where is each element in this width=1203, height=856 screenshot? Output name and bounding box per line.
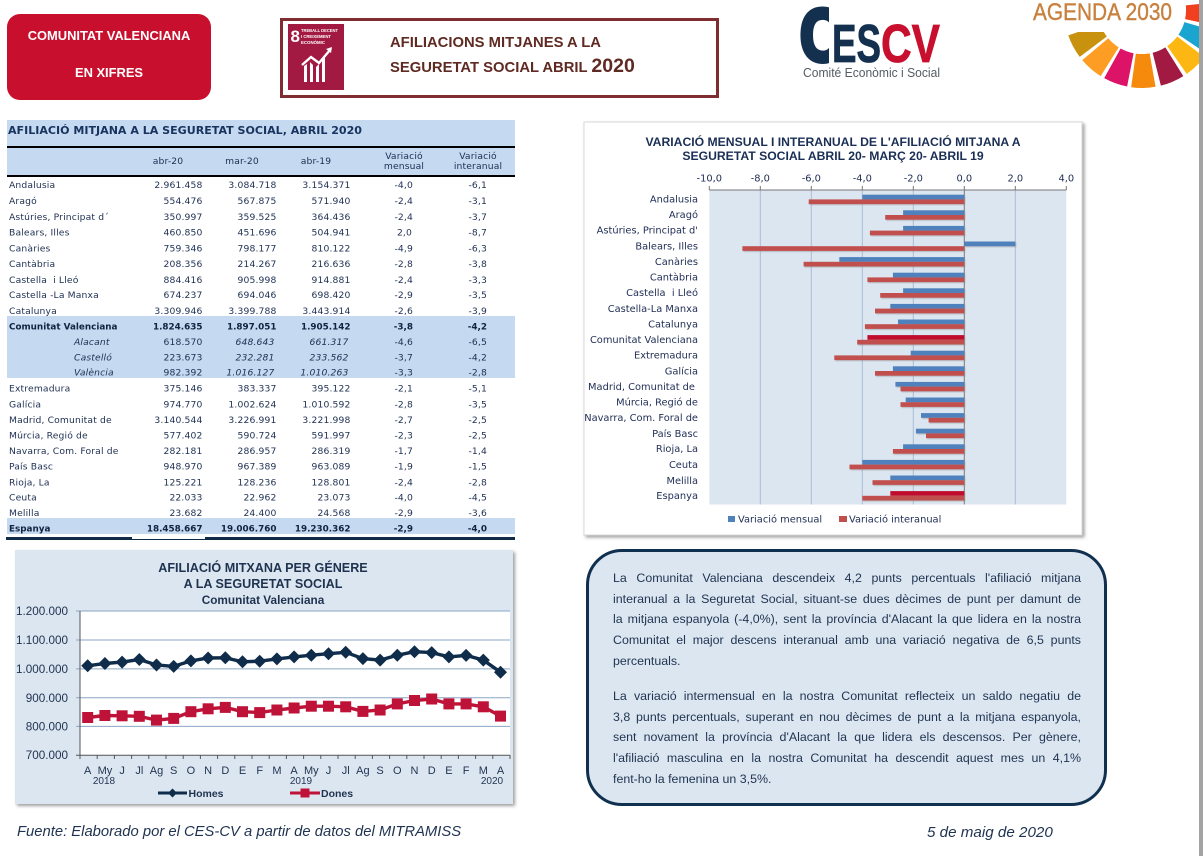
row: Alacant: -4,6 — [394, 337, 413, 348]
x axis labels: -8,0 — [751, 174, 770, 184]
row: País Basc: 967.389 — [237, 462, 277, 472]
table header: Variació — [385, 151, 423, 162]
row: Melilla: -2,9 — [394, 508, 413, 519]
row: Comunitat Valenciana: -3,8 — [394, 322, 413, 332]
header title box — [280, 18, 719, 98]
month labels: S — [170, 765, 177, 777]
chart title: AFILIACIÓ MITXANA PER GÉNERE — [158, 560, 368, 575]
logo: CES CV: Comité Econòmic i Social — [803, 66, 940, 80]
month labels: M — [479, 765, 488, 777]
row: Aragó: -3,1 — [468, 196, 487, 207]
heading: affiliation title — [390, 34, 635, 76]
category labels: Castella-La Manxa — [608, 304, 698, 315]
month labels: Jl — [135, 765, 143, 777]
row: Andalusia: 2.961.458 — [154, 180, 203, 191]
month labels: My — [98, 765, 113, 777]
footer: source: Fuente: Elaborado por el CES-CV a partir de datos del MITRAMISS — [17, 824, 461, 840]
row: Comunitat Valenciana: 1.824.635 — [153, 322, 202, 332]
row: Canàries: 810.122 — [311, 244, 350, 254]
row: Canàries: 759.346 — [163, 244, 203, 254]
x axis labels: -6,0 — [802, 174, 821, 184]
chart title: A LA SEGURETAT SOCIAL — [184, 577, 343, 591]
row: Rioja: 125.221 — [163, 478, 202, 488]
chart title: VARIACIÓ MENSUAL I INTERANUAL DE L'AFILIACIÓ MITJANA A — [645, 134, 1021, 149]
row: Alacant: 648.643 — [235, 337, 275, 348]
row: Comunitat Valenciana: 1.897.051 — [227, 322, 276, 332]
row: Astúries — [9, 212, 487, 223]
monthly variation bars — [839, 195, 1015, 496]
row: Castella-La Manxa: 674.237 — [163, 290, 203, 301]
row: Castella-La Manxa — [9, 290, 487, 301]
header badge: Comunitat Valenciana en xifres: COMUNITAT VALENCIANA — [28, 28, 190, 43]
category labels: Extremadura — [634, 350, 698, 362]
month labels: E — [445, 765, 453, 777]
row: Comunitat Valenciana: -4,2 — [468, 322, 487, 332]
row: Aragó — [9, 196, 487, 207]
paragraph: monthly variation: fent-ho la femenina un 3,5%. — [613, 772, 771, 786]
table header: mensual — [384, 161, 424, 172]
row: Madrid: 3.221.998 — [302, 415, 351, 426]
table header — [153, 151, 502, 172]
row: Navarra: 286.957 — [237, 446, 277, 457]
row: Castelló: -4,2 — [468, 352, 487, 364]
month labels: N — [411, 765, 419, 777]
month labels: O — [393, 765, 402, 777]
row: Extremadura: 375.146 — [163, 384, 203, 394]
category labels: Comunitat Valenciana — [590, 335, 698, 346]
row: Castella-La Manxa: -3,5 — [468, 290, 487, 301]
row: Alacant — [73, 337, 487, 348]
month labels: My — [304, 765, 319, 777]
row: Navarra — [9, 446, 487, 457]
row: Galícia: 1.010.592 — [302, 400, 350, 410]
row: País Basc: 948.970 — [163, 462, 203, 472]
row: Castelló: 232.281 — [235, 352, 274, 364]
row: Aragó: Aragó — [9, 196, 37, 207]
paragraph: annual variation: interanual a la Seguretat Social, situant-se dues dècimes de punt per damunt de — [613, 592, 1081, 606]
row: Catalunya: -2,6 — [394, 306, 413, 317]
month labels: Jl — [342, 765, 350, 777]
row: València: 1.016.127 — [226, 368, 275, 378]
row: Castella i Lleó: 914.881 — [311, 275, 350, 286]
row: Extremadura: Extremadura — [9, 384, 70, 394]
category labels: Balears, Illes — [635, 242, 698, 252]
row: Madrid: 3.226.991 — [228, 415, 276, 426]
chart legend — [728, 514, 941, 526]
row: Alacant: Alacant — [73, 337, 110, 348]
category labels: Rioja, La — [656, 444, 698, 455]
paragraph: monthly variation: l'afiliació masculina en la nostra Comunitat ha descendit aquest mes un 4,1% — [613, 751, 1081, 765]
month labels: S — [376, 765, 384, 777]
row: Castella-La Manxa: Castella -La Manxa — [9, 290, 99, 301]
row: Extremadura: -5,1 — [468, 384, 487, 394]
table header: mar-20 — [225, 156, 259, 167]
row: Melilla: 24.568 — [317, 508, 350, 519]
row: Andalusia: -6,1 — [468, 180, 487, 191]
row: Múrcia: -2,3 — [394, 430, 413, 442]
row: Extremadura: 395.122 — [311, 384, 350, 394]
x axis labels: 0,0 — [956, 174, 972, 184]
row: Melilla: 23.682 — [169, 508, 202, 519]
x axis labels: 2,0 — [1007, 174, 1023, 184]
row: Rioja: -2,4 — [394, 478, 413, 488]
row: Balears: 2,0 — [397, 228, 412, 238]
row: Castella i Lleó — [9, 275, 487, 286]
row: Catalunya: 3.309.946 — [154, 306, 203, 317]
icon: SDG 8 decent work and economic growth: TREBALL DECENT — [301, 28, 338, 33]
row: Ceuta: 23.073 — [317, 492, 350, 504]
row: Comunitat Valenciana — [9, 322, 487, 332]
month labels: E — [239, 765, 246, 777]
year labels: 2019 — [290, 776, 313, 787]
table header: abr-20 — [153, 156, 183, 167]
row: Andalusia: 3.154.371 — [302, 180, 350, 191]
category labels: Melilla — [666, 476, 698, 487]
logo: Agenda 2030 wheel — [1032, 3, 1199, 88]
y axis labels: 800.000 — [26, 720, 68, 734]
month labels: A — [84, 765, 92, 777]
row: Galícia: 1.002.624 — [228, 400, 277, 410]
row: Cantàbria: 214.267 — [237, 259, 277, 270]
logo: CES CV: CV — [881, 14, 940, 74]
row: Andalusia — [9, 180, 487, 191]
month labels: A — [497, 765, 505, 777]
icon: SDG 8 decent work and economic growth: ECONÒMIC — [301, 40, 326, 45]
row: Castella-La Manxa: 694.046 — [237, 290, 277, 301]
row: Castelló: 233.562 — [309, 352, 349, 364]
icon: SDG 8 decent work and economic growth — [288, 24, 344, 90]
chart title: Comunitat Valenciana — [202, 593, 325, 607]
x axis labels: 4,0 — [1058, 174, 1074, 184]
row: Castelló: 223.673 — [163, 352, 203, 364]
row: País Basc: País Basc — [9, 462, 53, 472]
row: Múrcia: 591.997 — [311, 430, 351, 442]
category labels: Canàries — [655, 256, 698, 268]
x axis labels: -10,0 — [697, 174, 722, 184]
month labels: A — [290, 765, 298, 777]
chart legend — [158, 788, 353, 800]
row: Balears: Balears, Illes — [9, 228, 70, 238]
row: València: València — [74, 368, 114, 378]
row: Navarra: Navarra, Com. Foral de — [9, 446, 119, 457]
row: Melilla: 24.400 — [243, 508, 276, 519]
row: Canàries: Canàries — [9, 244, 51, 254]
row: Múrcia: 590.724 — [237, 430, 277, 442]
row: País Basc: 963.089 — [311, 462, 351, 472]
line: Homes — [88, 652, 500, 672]
row: València: -3,3 — [394, 368, 413, 378]
year labels: 2020 — [481, 776, 504, 787]
row: Rioja: 128.236 — [237, 478, 277, 488]
row: Astúries: Astúries, Principat d´ — [9, 212, 109, 223]
row: Andalusia: 3.084.718 — [228, 180, 277, 191]
paragraph: annual variation: Comunitat el major descens interanual amb una variació negativa de 6,5 punts — [613, 633, 1081, 647]
row: Múrcia: -2,5 — [468, 430, 487, 442]
row: València — [74, 368, 487, 378]
chart title — [645, 134, 1021, 163]
row: Balears: -8,7 — [468, 228, 487, 238]
category labels: Navarra, Com. Foral de — [584, 413, 698, 424]
category labels: Espanya — [656, 491, 698, 502]
row: Espanya: 19.230.362 — [295, 524, 350, 534]
chart legend: Variació interanual — [849, 514, 941, 526]
row: Balears: 460.850 — [163, 228, 203, 238]
row: País Basc: -1,5 — [468, 462, 487, 472]
row: Navarra: -1,7 — [394, 446, 413, 457]
row: Castella i Lleó: 884.416 — [163, 275, 203, 286]
row: Aragó: -2,4 — [394, 196, 413, 207]
row: Melilla — [9, 508, 487, 519]
row: Extremadura — [9, 384, 487, 394]
row: Catalunya: 3.399.788 — [228, 306, 277, 317]
y axis labels: 700.000 — [26, 749, 68, 762]
row: Extremadura: -2,1 — [394, 384, 413, 394]
line: Dones — [88, 699, 500, 720]
row: Canàries: -6,3 — [468, 244, 487, 254]
row: Astúries: 364.436 — [311, 212, 351, 223]
row: Aragó: 571.940 — [311, 196, 351, 207]
table title: AFILIACIÓ MITJANA A LA SEGURETAT SOCIAL, ABRIL 2020 — [8, 124, 362, 137]
paragraph: annual variation: La Comunitat Valenciana descendeix 4,2 punts percentuals l'afiliació mitjana — [613, 571, 1081, 585]
row: Castelló — [74, 352, 487, 364]
paragraph: monthly variation: 3,8 punts percentuals, superant en nou dècimes de punt a la mitjana espanyola, — [613, 710, 1081, 724]
row: Canàries: -4,9 — [394, 244, 413, 254]
row: Rioja: Rioja, La — [9, 478, 50, 488]
x axis labels: -4,0 — [853, 174, 872, 184]
row: Cantàbria: 208.356 — [163, 259, 203, 270]
month labels: J — [119, 765, 125, 777]
category labels: País Basc — [652, 428, 698, 440]
category labels: Castella i Lleó — [626, 287, 698, 299]
row: Espanya: 18.458.667 — [147, 524, 202, 534]
footer: date: 5 de maig de 2020 — [927, 824, 1053, 841]
row: Castelló: Castelló — [74, 352, 112, 364]
row: Canàries: 798.177 — [237, 244, 277, 254]
row: Aragó: 554.476 — [163, 196, 203, 207]
chart legend: Variació mensual — [738, 514, 822, 526]
category labels: Andalusia — [650, 194, 698, 206]
month labels: Ag — [356, 765, 370, 777]
chart title — [158, 560, 368, 607]
row: Andalusia: Andalusia — [9, 180, 55, 191]
row: Cantàbria — [9, 259, 487, 270]
year labels — [93, 776, 504, 787]
heading: affiliation title: AFILIACIONS MITJANES A LA — [390, 34, 601, 50]
row: Galícia: -3,5 — [468, 400, 487, 410]
row: Navarra: 282.181 — [163, 446, 202, 457]
row: Astúries: 350.997 — [163, 212, 203, 223]
row: Navarra: -1,4 — [468, 446, 487, 457]
y axis labels: 1.100.000 — [16, 634, 68, 647]
row: Castella i Lleó: -2,4 — [394, 275, 413, 286]
row: Alacant: 661.317 — [309, 337, 349, 348]
row: Melilla: Melilla — [9, 508, 39, 519]
row: Ceuta: 22.033 — [169, 492, 202, 504]
table header: Variació — [459, 151, 497, 162]
row: Catalunya: -3,9 — [468, 306, 487, 317]
row: Catalunya — [9, 306, 487, 317]
category labels: Astúries, Principat d' — [597, 224, 698, 236]
row: Espanya: Espanya — [9, 524, 50, 534]
row: Rioja: 128.801 — [311, 478, 350, 488]
row: Aragó: 567.875 — [237, 196, 277, 207]
row: País Basc: -1,9 — [394, 462, 413, 472]
month labels: O — [187, 765, 196, 777]
paragraph: monthly variation: sent novament la província d'Alacant la que lidera els descensos. Per gènere, — [613, 730, 1081, 744]
row: Rioja: -2,8 — [468, 478, 487, 488]
row: Galícia: -2,8 — [394, 400, 413, 410]
row: Rioja — [9, 478, 487, 488]
row: Cantàbria: Cantàbria — [9, 259, 55, 270]
row: Madrid — [9, 415, 487, 426]
row: Alacant: -6,5 — [468, 337, 487, 348]
row: Castella i Lleó: -3,3 — [468, 275, 487, 286]
row: País Basc — [9, 462, 487, 472]
paragraph: monthly variation — [613, 689, 1081, 786]
row: Andalusia: -4,0 — [394, 180, 413, 191]
month labels: N — [204, 765, 212, 777]
row: Astúries: 359.525 — [237, 212, 277, 223]
header badge: Comunitat Valenciana en xifres — [7, 14, 211, 100]
month labels: Ag — [150, 765, 163, 777]
row: Galícia — [9, 400, 487, 410]
row: Navarra: 286.319 — [311, 446, 351, 457]
row: Galícia: 974.770 — [163, 400, 203, 410]
icon: SDG 8 decent work and economic growth: I CREIXEMENT — [301, 34, 331, 39]
paragraph: annual variation: la mitjana espanyola (-4,0%), sent la província d'Alacant la que lidera en la nostra — [613, 612, 1081, 626]
row: València: -2,8 — [468, 368, 487, 378]
row: Astúries: -2,4 — [394, 212, 413, 223]
month labels: D — [428, 765, 436, 777]
row: Múrcia — [9, 430, 487, 442]
row: Canàries — [9, 244, 487, 254]
category labels — [584, 194, 698, 502]
month labels: F — [463, 765, 470, 777]
row: Astúries: -3,7 — [468, 212, 487, 223]
heading: affiliation title: SEGURETAT SOCIAL ABRIL 2020 — [390, 54, 635, 76]
row: Madrid: -2,5 — [468, 415, 487, 426]
row: Castella i Lleó: 905.998 — [237, 275, 277, 286]
row: Cantàbria: -2,8 — [394, 259, 413, 270]
month labels: D — [221, 765, 229, 777]
text box: commentary — [586, 549, 1107, 806]
category labels: Catalunya — [648, 320, 698, 330]
row: Galícia: Galícia — [9, 400, 41, 410]
year labels: 2018 — [93, 776, 116, 787]
row: Ceuta: -4,5 — [468, 492, 487, 504]
row: València: 982.392 — [163, 368, 202, 378]
icon: SDG 8 decent work and economic growth: 8 — [290, 27, 300, 46]
month labels — [84, 765, 505, 777]
category labels: Galícia — [665, 366, 698, 378]
row: Madrid: 3.140.544 — [154, 415, 203, 426]
row: Cantàbria: 216.636 — [311, 259, 351, 270]
logo: CES CV: ES — [832, 14, 881, 74]
row: Castella-La Manxa: -2,9 — [394, 290, 413, 301]
row: Ceuta — [9, 492, 487, 504]
row: Madrid: Madrid, Comunitat de — [9, 415, 112, 426]
category labels: Madrid, Comunitat de — [588, 382, 695, 393]
row: Extremadura: 383.337 — [237, 384, 277, 394]
paragraph: annual variation — [613, 571, 1081, 668]
row: Ceuta: Ceuta — [9, 492, 37, 504]
table header: interanual — [454, 161, 502, 172]
x axis labels: -2,0 — [904, 174, 923, 184]
header badge: Comunitat Valenciana en xifres: EN XIFRES — [75, 65, 143, 80]
category labels: Múrcia, Regió de — [616, 396, 698, 408]
row: Múrcia: Múrcia, Regió de — [9, 430, 88, 442]
row: Espanya: -4,0 — [468, 524, 487, 534]
row: Múrcia: 577.402 — [163, 430, 202, 442]
month labels: F — [256, 765, 263, 777]
y axis labels: 1.200.000 — [16, 605, 68, 618]
row: Comunitat Valenciana: 1.905.142 — [301, 322, 350, 332]
category labels: Cantàbria — [650, 272, 698, 284]
paragraph: annual variation: percentuals. — [613, 654, 681, 668]
logo: CES CV — [800, 6, 940, 77]
y axis labels — [16, 605, 68, 762]
row: Castella i Lleó: Castella i Lleó — [9, 275, 79, 286]
table header: abr-19 — [301, 156, 331, 167]
row: Espanya: -2,9 — [394, 524, 413, 534]
chart legend: Homes — [188, 788, 224, 800]
row: Alacant: 618.570 — [163, 337, 203, 348]
month labels: M — [272, 765, 281, 777]
row: Comunitat Valenciana: Comunitat Valenciana — [9, 322, 118, 332]
chart legend: Dones — [321, 788, 353, 800]
row: Catalunya: Catalunya — [9, 306, 57, 317]
category labels: Ceuta — [669, 460, 698, 471]
month labels: J — [326, 765, 331, 777]
row: Cantàbria: -3,8 — [468, 259, 487, 270]
x axis labels — [697, 174, 1074, 184]
chart title: SEGURETAT SOCIAL ABRIL 20- MARÇ 20- ABRIL 19 — [682, 149, 984, 163]
row: Catalunya: 3.443.914 — [302, 306, 351, 317]
row: Espanya — [9, 524, 487, 534]
right edge strip — [1199, 0, 1203, 856]
row: Espanya: 19.006.760 — [221, 524, 276, 534]
row: Ceuta: -4,0 — [394, 492, 413, 504]
row: Balears: 451.696 — [237, 228, 277, 238]
row: Balears — [9, 228, 487, 238]
row: Madrid: -2,7 — [394, 415, 413, 426]
row: Balears: 504.941 — [311, 228, 350, 238]
yearly variation bars — [742, 199, 964, 500]
row: Castelló: -3,7 — [394, 352, 413, 364]
row: Castella-La Manxa: 698.420 — [311, 290, 351, 301]
row: Melilla: -3,6 — [468, 508, 487, 519]
row: Ceuta: 22.962 — [243, 492, 276, 504]
row: València: 1.010.263 — [300, 368, 349, 378]
y axis labels: 1.000.000 — [16, 663, 68, 676]
category labels: Aragó — [669, 209, 698, 221]
paragraph: monthly variation: La variació intermensual en la nostra Comunitat reflecteix un saldo negatiu de — [613, 689, 1081, 703]
y axis labels: 900.000 — [26, 692, 68, 705]
